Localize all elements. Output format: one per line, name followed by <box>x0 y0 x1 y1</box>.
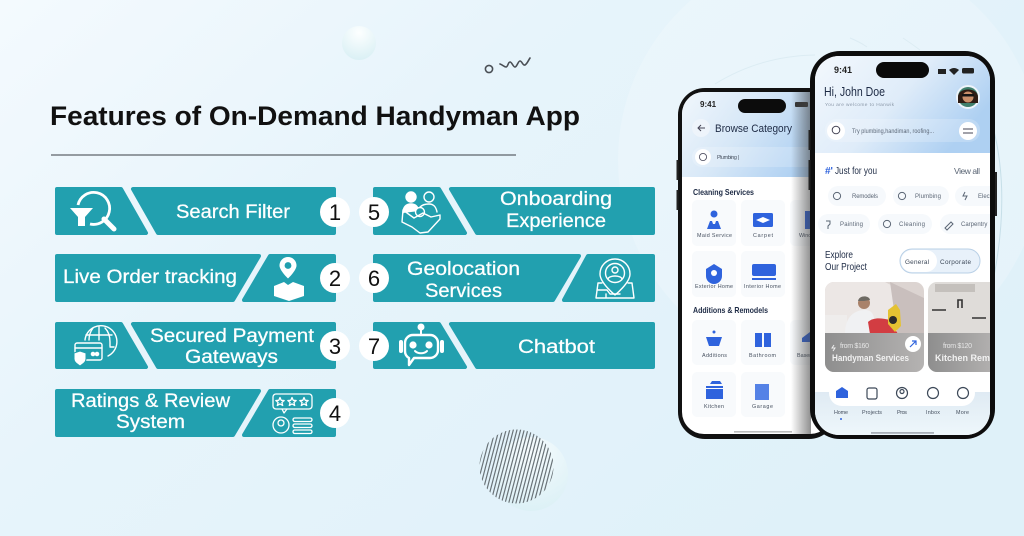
feature 6: geolocation services: Geolocation <box>407 259 520 280</box>
feature 3: secured payment gateways: Secured Payment <box>150 326 315 347</box>
category chips: Plumbing <box>915 194 941 200</box>
category chips: Electrical <box>978 194 1002 200</box>
explore our project <box>825 250 867 273</box>
divider line <box>51 154 516 156</box>
category chips: Cleaning <box>899 222 925 228</box>
cleaning services: Maid Service <box>697 233 732 239</box>
category chips: Painting <box>840 222 863 228</box>
number badges left: 2 <box>329 266 341 291</box>
back phone: browse category: 9:41 <box>700 100 717 109</box>
toggle <box>900 249 980 273</box>
project card: kitchen remodel <box>928 282 990 372</box>
title: Features of On-Demand Handyman App <box>50 101 580 131</box>
category chips: Remodels <box>852 194 878 200</box>
greeting: You are welcome to Hanwik <box>825 102 895 108</box>
greeting: Hi, John Doe <box>824 84 885 99</box>
additions and remodels: Basement <box>797 353 822 359</box>
browse header <box>692 119 792 137</box>
icon: handshake onboarding <box>402 192 440 233</box>
feature 4: ratings and review system <box>57 391 334 435</box>
toggle: Corporate <box>940 259 971 266</box>
decorative hatched circle <box>480 430 558 504</box>
bottom navigation: Pros <box>897 410 907 416</box>
number badges left: 3 <box>329 334 341 359</box>
cleaning services: Carpet <box>753 233 774 239</box>
cleaning services: Interior Home <box>744 284 781 290</box>
bottom navigation: More <box>956 410 969 416</box>
browse header: Browse Category <box>715 123 792 135</box>
project card: kitchen remodel: Kitchen Remodel <box>935 353 1009 363</box>
search bar <box>825 119 980 142</box>
number badges left <box>320 197 350 428</box>
just for you: View all <box>954 166 980 176</box>
icon: rating stars and reviewer <box>273 394 312 434</box>
feature 4: ratings and review system: System <box>116 412 185 433</box>
number badges right: 5 <box>368 200 380 225</box>
additions and remodels: Garage <box>752 404 773 410</box>
feature 1: search filter: Search Filter <box>176 202 291 223</box>
additions and remodels <box>693 307 810 409</box>
avatar <box>956 85 980 109</box>
just for you <box>825 166 980 176</box>
front phone: home screen <box>808 51 1009 439</box>
feature 5: onboarding experience <box>375 189 653 233</box>
additions and remodels: Additions <box>702 353 727 359</box>
toggle: General <box>905 259 929 266</box>
additions and remodels: Additions & Remodels <box>693 305 768 315</box>
number badges left: 4 <box>329 401 341 426</box>
feature 1: search filter <box>57 189 334 233</box>
project card: handyman services: Handyman Services <box>832 353 909 363</box>
bottom navigation: Home <box>834 410 848 416</box>
number badges right: 7 <box>368 334 380 359</box>
decorative sphere <box>342 26 376 60</box>
just for you: Just for you <box>835 166 877 177</box>
project card: handyman services <box>825 282 924 372</box>
front phone: home screen: 9:41 <box>834 65 852 75</box>
bottom navigation: Inbox <box>926 410 940 416</box>
decorative squiggle <box>485 58 530 73</box>
icon: location on box <box>274 257 304 301</box>
bottom navigation: Projects <box>862 410 882 416</box>
search bar: Try plumbing,handiman, roofing... <box>852 129 934 135</box>
number badges right: 6 <box>368 266 380 291</box>
icon: map pin <box>596 259 634 298</box>
feature 5: onboarding experience: Experience <box>506 211 606 232</box>
feature 5: onboarding experience: Onboarding <box>500 189 612 210</box>
feature 3: secured payment gateways <box>57 324 334 368</box>
additions and remodels: Kitchen <box>704 404 724 410</box>
search bar <box>695 147 808 167</box>
feature 4: ratings and review system: Ratings & Review <box>71 391 230 412</box>
feature 6: geolocation services: Services <box>425 281 502 302</box>
icon: search filter <box>70 192 114 229</box>
number badges right <box>359 197 389 361</box>
bottom navigation <box>815 386 990 435</box>
feature 7: chatbot: Chatbot <box>518 337 596 358</box>
project card: handyman services: from $160 <box>840 343 869 350</box>
icon: chatbot <box>399 324 444 365</box>
icon: globe and card <box>74 326 117 366</box>
just for you: #' <box>825 166 833 177</box>
cleaning services: Window <box>799 233 818 239</box>
project card: kitchen remodel: from $120 <box>943 343 972 350</box>
category chips: Carpentry <box>961 222 987 228</box>
feature 2: live order tracking: Live Order tracking <box>63 267 237 288</box>
feature 7: chatbot <box>375 324 653 367</box>
number badges left: 1 <box>329 200 341 225</box>
cleaning services: Cleaning Services <box>693 187 754 197</box>
cleaning services <box>693 189 810 288</box>
category chips <box>818 186 1002 234</box>
feature 2: live order tracking <box>57 256 334 301</box>
back phone: browse category <box>676 88 836 439</box>
greeting <box>824 86 894 106</box>
feature 6: geolocation services <box>375 256 653 302</box>
cleaning services: Exterior Home <box>695 284 733 290</box>
explore our project: Explore <box>825 250 853 261</box>
feature 3: secured payment gateways: Gateways <box>185 347 278 368</box>
explore our project: Our Project <box>825 262 867 273</box>
search bar: Plumbing | <box>717 155 739 161</box>
additions and remodels: Bathroom <box>749 353 776 359</box>
